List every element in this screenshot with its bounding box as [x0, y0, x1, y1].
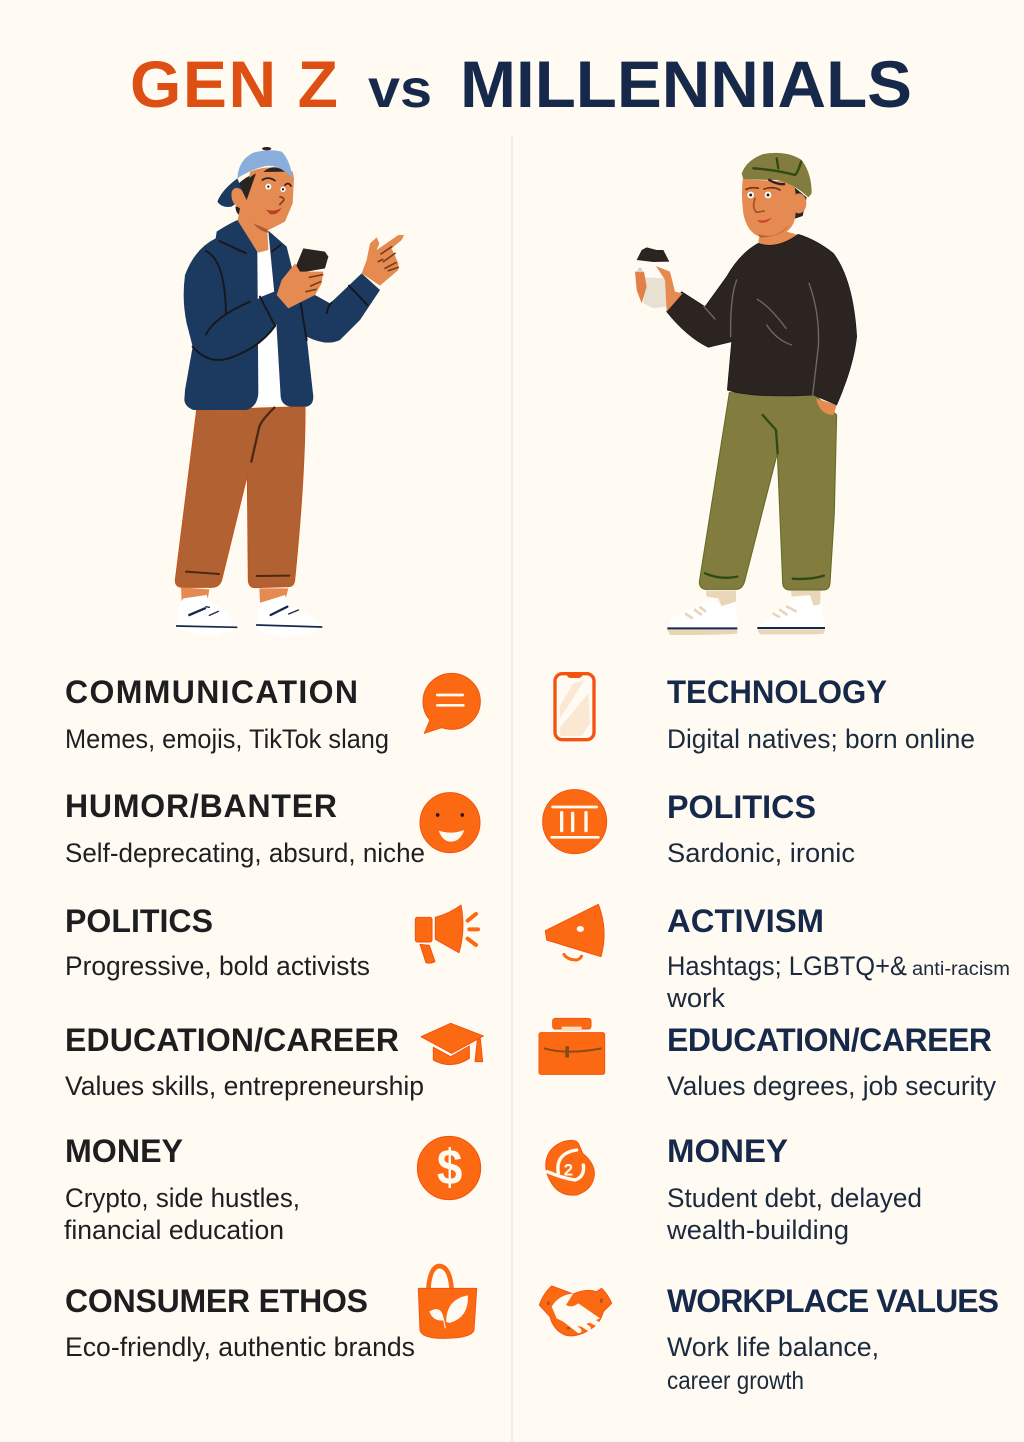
item: money: [64, 1133, 481, 1245]
icon: debt spiral: [546, 1140, 594, 1195]
item: consumer ethos: [65, 1266, 477, 1362]
item: money: MONEY: [65, 1133, 183, 1169]
title: vs: [368, 59, 432, 119]
title: MILLENNIALS: [460, 47, 912, 121]
item: money: MONEY: [667, 1133, 788, 1169]
icon: graduation cap: [421, 1023, 483, 1065]
item: activism: [545, 903, 1010, 1013]
icon: eco bag: [418, 1266, 477, 1338]
icon: speech bubble: [423, 673, 480, 733]
icon: handshake: [539, 1286, 612, 1336]
item: workplace values: [539, 1283, 999, 1395]
item: politics: POLITICS: [667, 789, 816, 825]
item: activism: anti-racism: [912, 959, 1010, 980]
item: humor: HUMOR/BANTER: [65, 788, 337, 824]
item: education: [65, 1022, 483, 1101]
item: communication: COMMUNICATION: [65, 674, 358, 710]
item: education: EDUCATION/CAREER: [667, 1022, 992, 1058]
title: [130, 47, 912, 121]
item: politics: POLITICS: [65, 903, 213, 939]
item: technology: TECHNOLOGY: [667, 674, 887, 710]
icon: tilted megaphone: [545, 904, 604, 960]
icon: megaphone: [415, 905, 478, 963]
item: money: financial education: [64, 1215, 284, 1245]
figure: Gen Z person with phone: [175, 147, 404, 637]
item: workplace values: Work life balance,: [667, 1332, 879, 1362]
item: education: Values degrees, job security: [667, 1071, 996, 1101]
item: activism: ACTIVISM: [667, 903, 824, 939]
item: consumer ethos: CONSUMER ETHOS: [65, 1283, 368, 1319]
item: education: [539, 1018, 996, 1101]
item: consumer ethos: Eco-friendly, authentic brands: [65, 1332, 415, 1362]
icon: smartphone: [555, 674, 594, 740]
item: technology: [555, 674, 975, 754]
item: education: Values skills, entrepreneurship: [65, 1071, 424, 1101]
item: money: Crypto, side hustles,: [65, 1183, 300, 1213]
item: technology: Digital natives; born online: [667, 724, 975, 754]
icon: dollar coin: $: [437, 1140, 463, 1196]
item: humor: [65, 788, 480, 868]
item: money: Student debt, delayed: [667, 1183, 922, 1213]
item: money: [546, 1133, 922, 1245]
icon: dollar coin: [417, 1136, 481, 1200]
figure: Millennial person with coffee: [635, 153, 857, 635]
icon: institution: [543, 790, 607, 854]
icon: briefcase: [539, 1018, 605, 1074]
item: activism: work: [666, 983, 725, 1013]
item: politics: [65, 903, 478, 981]
item: politics: Progressive, bold activists: [65, 951, 370, 981]
item: communication: [65, 673, 480, 754]
item: workplace values: WORKPLACE VALUES: [667, 1283, 999, 1319]
item: politics: [543, 789, 855, 868]
item: money: wealth-building: [666, 1215, 849, 1245]
title: GEN Z: [130, 47, 338, 121]
item: communication: Memes, emojis, TikTok slang: [65, 724, 389, 754]
item: activism: Hashtags; LGBTQ+&: [667, 951, 907, 981]
icon: smiley: [420, 793, 480, 853]
item: education: EDUCATION/CAREER: [65, 1022, 399, 1058]
item: workplace values: career growth: [667, 1367, 804, 1395]
item: politics: Sardonic, ironic: [667, 838, 855, 868]
panel: Gen Z traits: [64, 673, 483, 1362]
icon: debt spiral: 2: [564, 1161, 573, 1180]
item: humor: Self-deprecating, absurd, niche: [65, 838, 425, 868]
panel: Millennial traits: [539, 674, 1010, 1395]
